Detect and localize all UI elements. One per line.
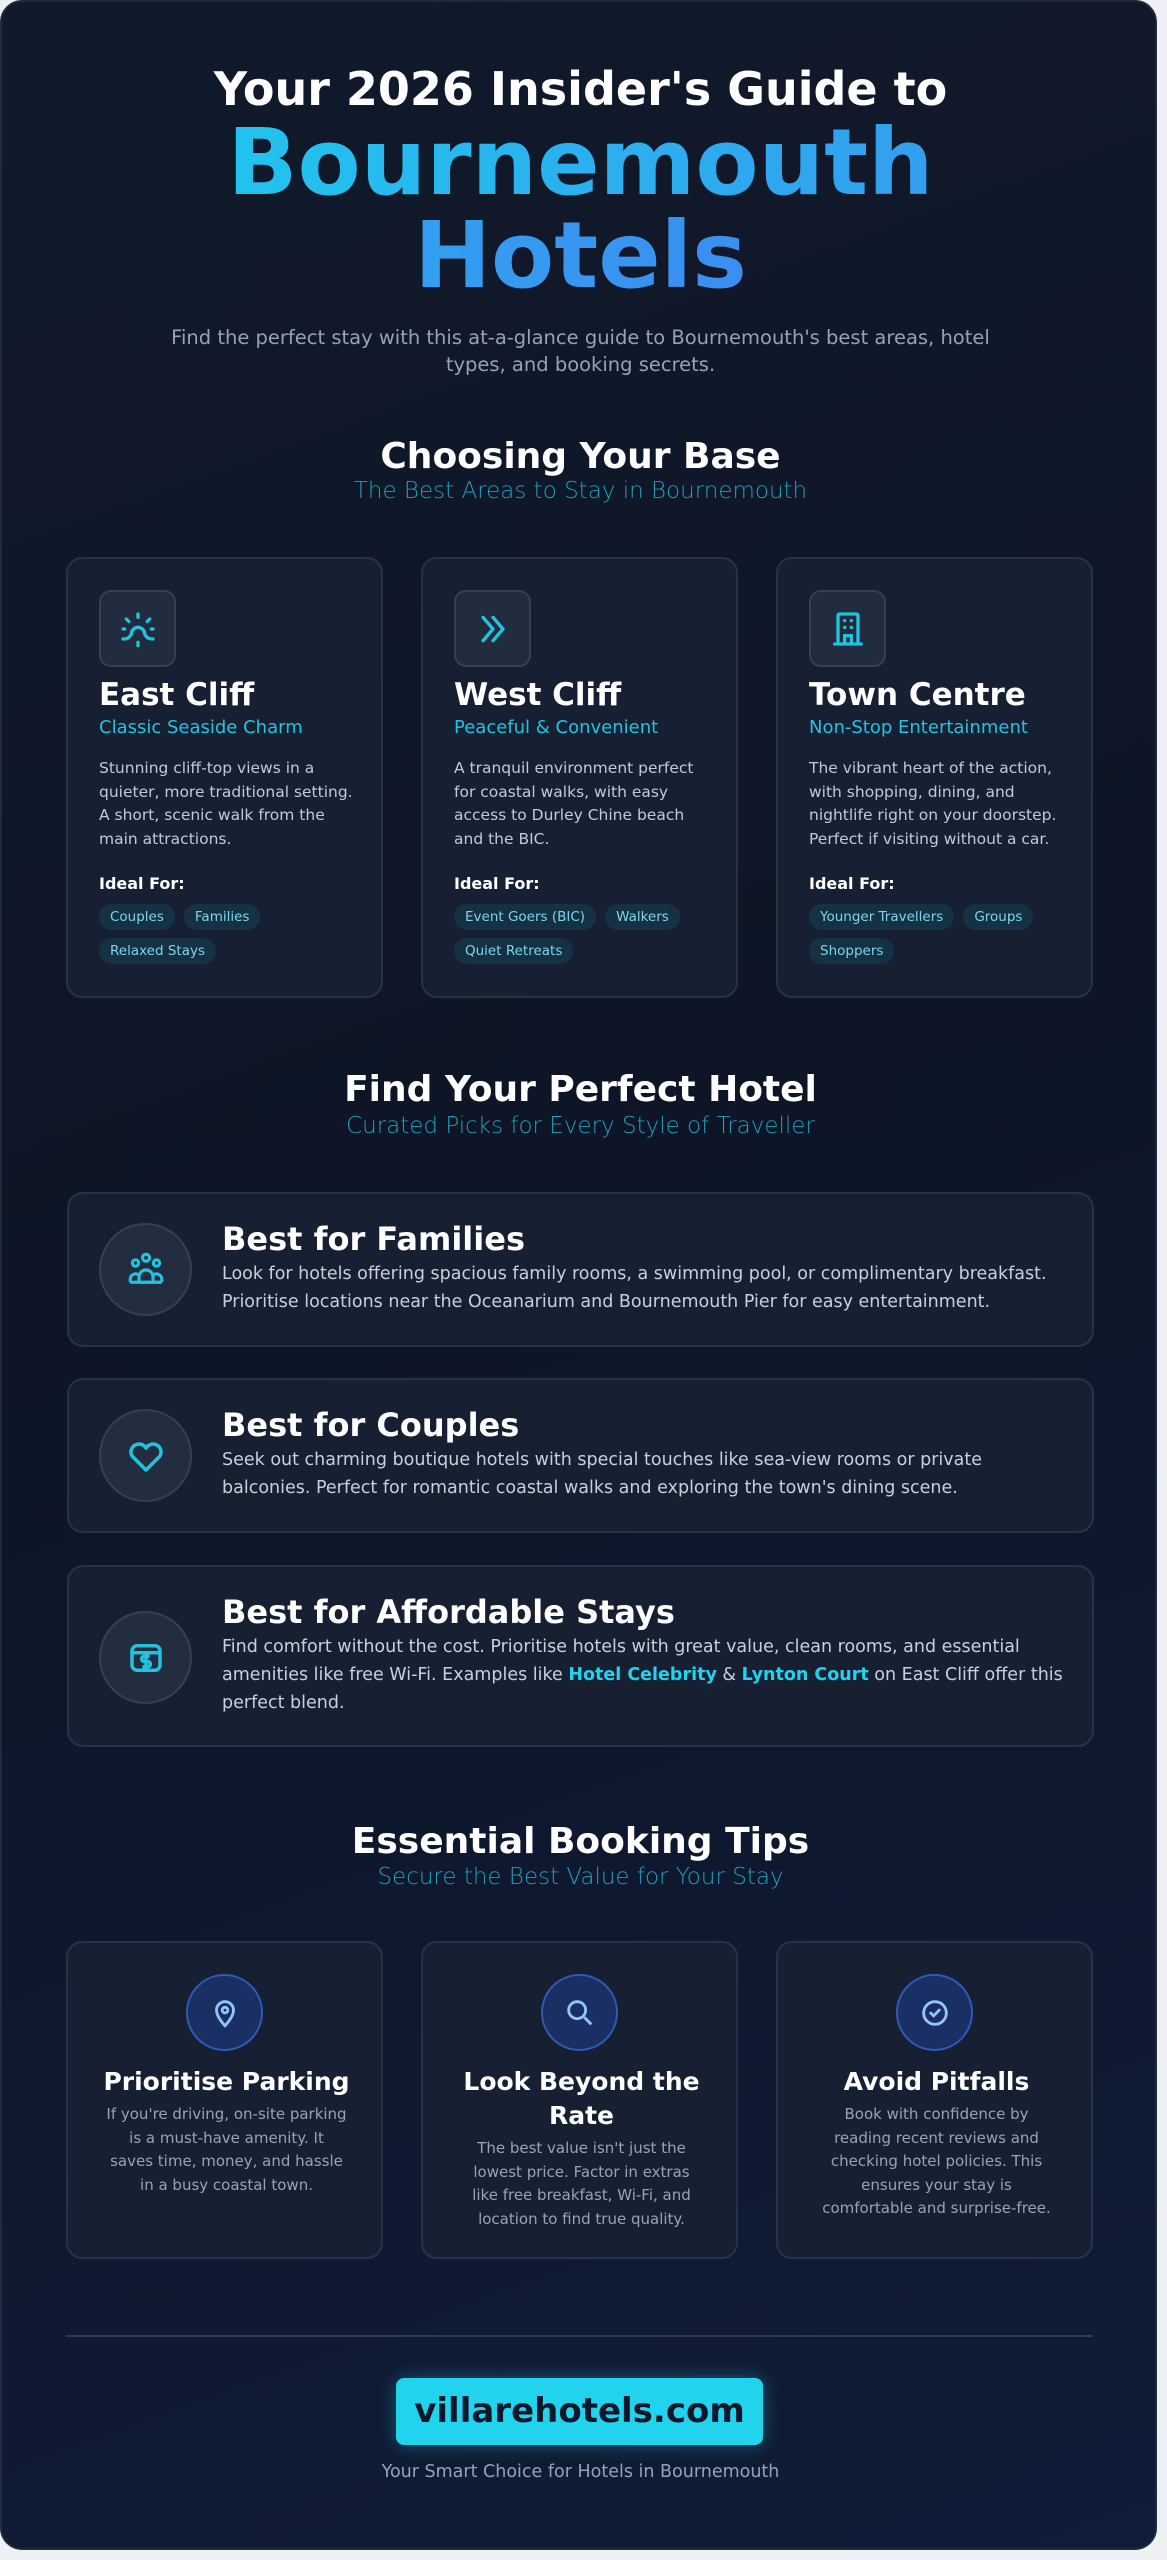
- description: Find comfort without the cost. Prioritise hotels with great value, clean rooms, and essential amenities like free Wi-Fi. Examples like Hotel Celebrity & Lynton Court on East Cliff offer this perfect blend.: [222, 1637, 1063, 1713]
- icon: chevrons: [454, 590, 531, 667]
- panel: affordable: [67, 1565, 1094, 1747]
- description: Book with confidence by reading recent reviews and checking hotel policies. This ensures your stay is comfortable and surprise-free.: [822, 2105, 1051, 2217]
- description: A tranquil environment perfect for coastal walks, with easy access to Durley Chine beach and the BIC.: [454, 759, 694, 848]
- tags: Couples: [110, 909, 164, 925]
- tags: Shoppers: [820, 943, 883, 959]
- panel: tip pitfalls: [776, 1941, 1093, 2259]
- description: Seek out charming boutique hotels with special touches like sea-view rooms or private balconies. Perfect for romantic coastal walks and exploring the town's dining scene.: [222, 1450, 982, 1498]
- tagline: Peaceful & Convenient: [454, 717, 658, 738]
- tags: Younger Travellers: [820, 909, 943, 925]
- panel: West Cliff: [421, 557, 738, 998]
- panel: East Cliff: [66, 557, 383, 998]
- tagline: Non-Stop Entertainment: [809, 717, 1028, 738]
- icon: pin: [186, 1974, 263, 2051]
- description: If you're driving, on-site parking is a must-have amenity. It saves time, money, and hassle in a busy coastal town.: [106, 2105, 347, 2194]
- description: The vibrant heart of the action, with shopping, dining, and nightlife right on your doorstep. Perfect if visiting without a car.: [809, 759, 1056, 848]
- panel: families: [67, 1192, 1094, 1347]
- tags: [809, 904, 1033, 964]
- title: Best for Families: [222, 1220, 525, 1258]
- title: Best for Affordable Stays: [222, 1593, 675, 1631]
- cta button: [396, 2378, 763, 2445]
- title: West Cliff: [454, 677, 621, 713]
- title: East Cliff: [99, 677, 254, 713]
- heading: find your perfect hotel: Find Your Perfect Hotel: [344, 1069, 817, 1110]
- icon: sun: [99, 590, 176, 667]
- panel: tip parking: [66, 1941, 383, 2259]
- description: Look for hotels offering spacious family rooms, a swimming pool, or complimentary breakfast. Prioritise locations near the Oceanarium and Bournemouth Pier for easy entertainment.: [222, 1264, 1047, 1312]
- tags: Walkers: [616, 909, 669, 925]
- intro text: Find the perfect stay with this at-a-glance guide to Bournemouth's best areas, hotel types, and booking secrets.: [171, 326, 990, 376]
- panel: Town Centre: [776, 557, 1093, 998]
- panel: tip rate: [421, 1941, 738, 2259]
- icon: check: [896, 1974, 973, 2051]
- icon: heart: [99, 1409, 192, 1502]
- subheading: Secure the Best Value for Your Stay: [377, 1864, 784, 1890]
- tags: Quiet Retreats: [465, 943, 562, 959]
- title: Best for Couples: [222, 1406, 519, 1444]
- icon: search: [541, 1974, 618, 2051]
- tags: Relaxed Stays: [110, 943, 205, 959]
- panel: couples: [67, 1378, 1094, 1533]
- tags: Families: [195, 909, 249, 925]
- footer tagline: Your Smart Choice for Hotels in Bournemouth: [382, 2462, 779, 2482]
- icon: building: [809, 590, 886, 667]
- description: Stunning cliff-top views in a quieter, more traditional setting. A short, scenic walk from the main attractions.: [99, 759, 353, 848]
- title: Look Beyond the Rate: [463, 2067, 700, 2130]
- heading: essential booking tips: Essential Booking Tips: [352, 1821, 809, 1862]
- title: Avoid Pitfalls: [844, 2067, 1029, 2096]
- title line 1: Your 2026 Insider's Guide to: [214, 62, 947, 116]
- icon: family: [99, 1223, 192, 1316]
- tags: Event Goers (BIC): [465, 909, 585, 925]
- subheading: Curated Picks for Every Style of Traveller: [346, 1113, 815, 1139]
- tags: [99, 904, 260, 964]
- ideal for: Ideal For:: [99, 874, 185, 893]
- title: Prioritise Parking: [103, 2067, 350, 2096]
- title main: Bournemouth: [227, 109, 934, 216]
- tagline: Classic Seaside Charm: [99, 717, 303, 738]
- heading: choosing your base: Choosing Your Base: [380, 436, 781, 477]
- tags: Groups: [974, 909, 1022, 925]
- title: Town Centre: [809, 677, 1026, 713]
- title main: [227, 109, 934, 309]
- cta button: villarehotels.com: [414, 2391, 745, 2431]
- ideal for: Ideal For:: [809, 874, 895, 893]
- title main: Hotels: [414, 202, 747, 309]
- ideal for: Ideal For:: [454, 874, 540, 893]
- icon: money: [99, 1611, 192, 1704]
- subheading: The Best Areas to Stay in Bournemouth: [354, 478, 807, 504]
- description: The best value isn't just the lowest price. Factor in extras like free breakfast, Wi-Fi, and location to find true quality.: [472, 2139, 691, 2228]
- tags: [454, 904, 680, 964]
